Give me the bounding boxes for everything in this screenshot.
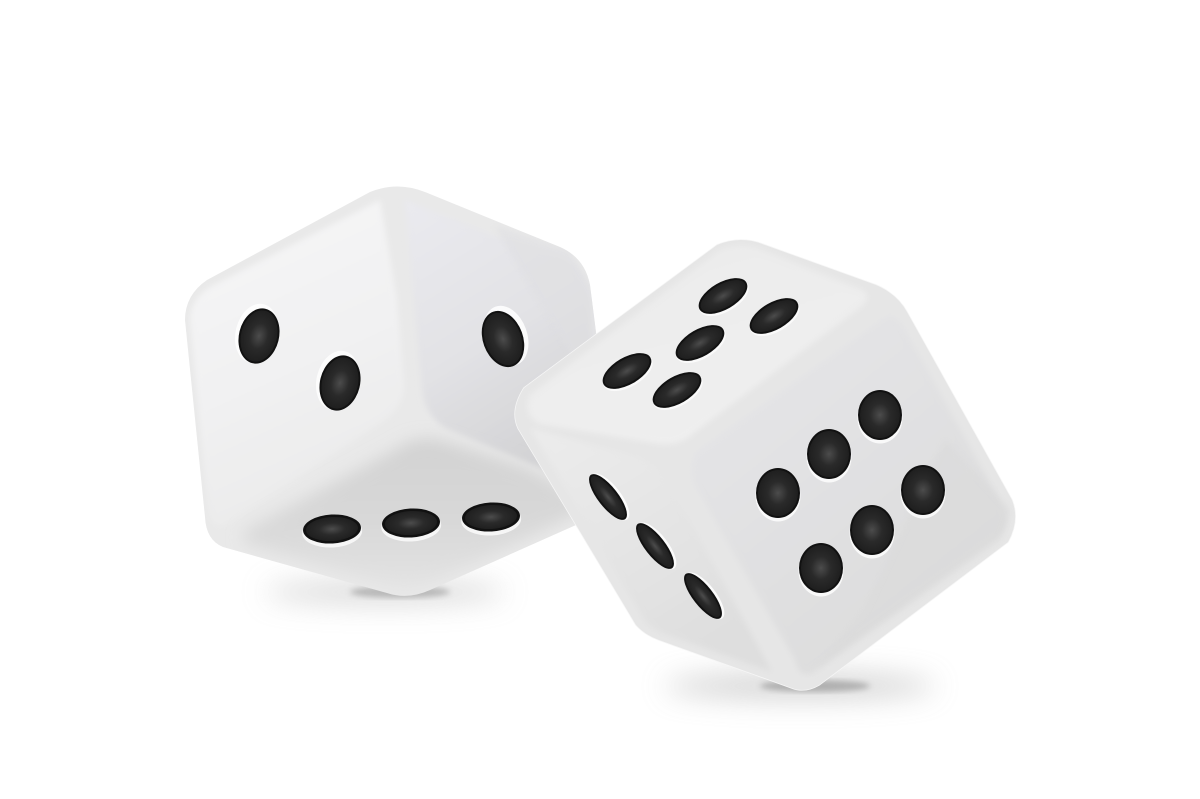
right face lower sheen xyxy=(810,440,1010,675)
pip: two, upper xyxy=(229,299,286,368)
light rim around right die xyxy=(515,240,1015,690)
pip: six, bottom left xyxy=(798,543,844,596)
pip: six, bottom right xyxy=(900,465,946,518)
left face xyxy=(530,428,772,672)
pip: five, right xyxy=(743,291,806,344)
left face xyxy=(192,204,394,417)
pip: five, left xyxy=(596,346,659,399)
shadow: right die xyxy=(665,674,935,698)
pip: three, upper xyxy=(583,467,636,526)
pip: three, middle xyxy=(380,507,442,543)
die: left (faces two, one, three) xyxy=(185,186,603,596)
die body outline xyxy=(515,240,1015,690)
pip: five, top xyxy=(692,271,755,324)
pip: five, centre xyxy=(669,318,732,371)
shaded faces xyxy=(190,200,600,589)
shadow: left die xyxy=(265,581,505,603)
pip: three, lower xyxy=(678,566,731,625)
pip: six, bottom middle xyxy=(850,505,894,558)
pip: three, left xyxy=(301,513,363,549)
pip: one xyxy=(473,299,536,373)
die body outline xyxy=(185,186,603,596)
top face xyxy=(612,383,750,440)
pip: three, right xyxy=(460,501,522,537)
pip: six, top left xyxy=(756,468,800,522)
right face xyxy=(427,318,570,468)
pip: three, middle xyxy=(630,516,683,575)
illustration: two dice xyxy=(185,186,1016,710)
pip: two, lower xyxy=(310,346,367,415)
die: right (faces five, three, six) xyxy=(515,240,1015,690)
shaded faces xyxy=(612,383,1006,670)
pip: six, top right xyxy=(858,390,902,444)
right face xyxy=(803,646,832,668)
pip: six, top middle xyxy=(806,429,852,482)
right face sheen xyxy=(495,226,600,400)
bottom face xyxy=(250,436,570,572)
pip: five, bottom xyxy=(646,365,709,418)
